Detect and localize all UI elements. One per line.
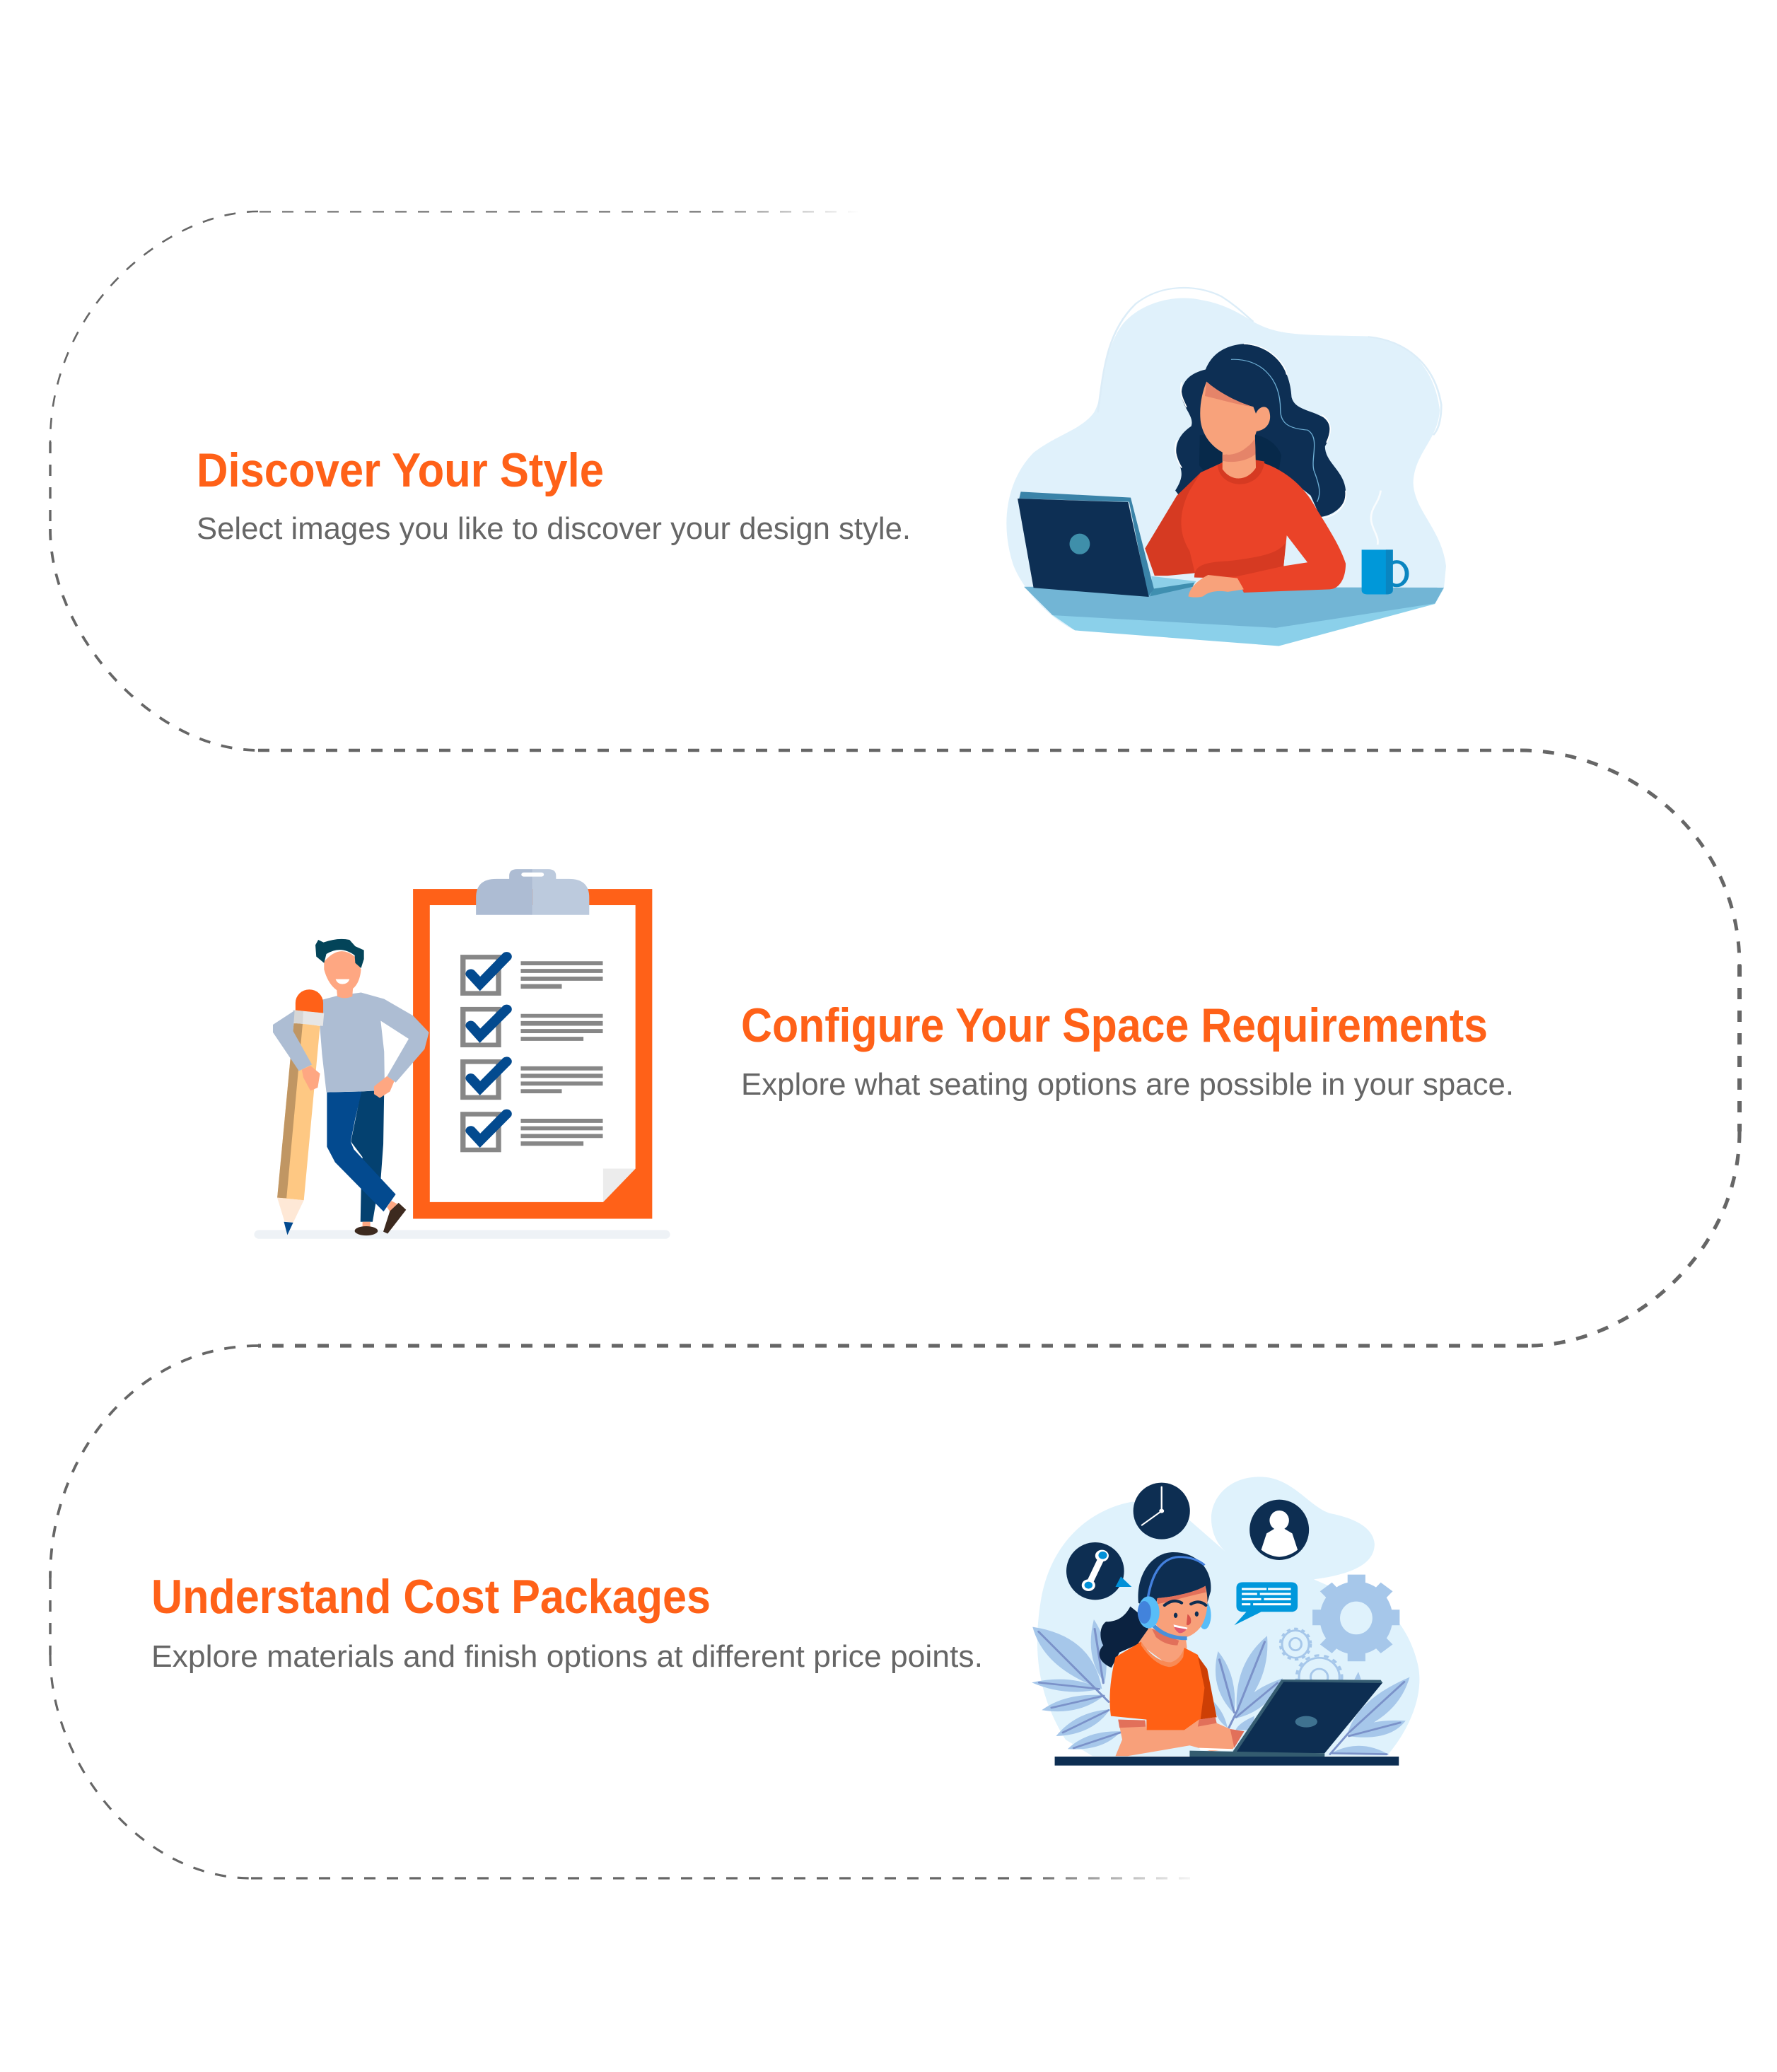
- blob background: [1006, 298, 1446, 632]
- table: [1024, 587, 1444, 646]
- laptop: [1189, 1680, 1382, 1757]
- man: [315, 939, 429, 1235]
- illustration: support agent with headset: [1032, 1477, 1419, 1766]
- red sweater: [1145, 460, 1346, 593]
- hair: [1175, 344, 1346, 518]
- heading: understand cost packages: Understand Cost Packages: [151, 1570, 711, 1624]
- ground: [254, 1230, 670, 1239]
- laptop: [1018, 491, 1196, 597]
- checklist row 3: [463, 1061, 602, 1098]
- agent: [1100, 1552, 1245, 1756]
- heading: discover your style: Discover Your Style: [197, 443, 604, 497]
- panel: understand cost packages text: [151, 1570, 983, 1674]
- illustration: man with clipboard and pencil: [254, 869, 670, 1239]
- clipboard: [413, 869, 652, 1218]
- panel: configure your space requirements text: [741, 999, 1514, 1102]
- man's left arm: [273, 1011, 320, 1090]
- user icon: [1249, 1500, 1309, 1560]
- description: discover your style: Select images you like to discover your design style.: [197, 511, 911, 546]
- heading: configure your space requirements: Configure Your Space Requirements: [741, 999, 1488, 1052]
- illustration: woman at laptop: [1006, 288, 1446, 646]
- blob background: [1037, 1477, 1419, 1756]
- description: understand cost packages: Explore materials and finish options at different price points.: [151, 1639, 983, 1674]
- panel: discover your style text: [197, 443, 911, 546]
- dashed connector path: [50, 211, 1740, 1878]
- checklist row 2: [463, 1009, 602, 1045]
- hand: [1189, 575, 1244, 598]
- chat bubble icon: [1234, 1582, 1298, 1625]
- checklist row 1: [463, 957, 602, 994]
- small gears: [1281, 1629, 1342, 1699]
- clock icon: [1134, 1483, 1190, 1540]
- leaves: [1032, 1619, 1410, 1755]
- description: configure your space requirements: Explore what seating options are possible in your space.: [741, 1067, 1514, 1102]
- checklist row 4: [463, 1114, 602, 1150]
- neck and face: [1200, 382, 1270, 478]
- coffee mug: [1362, 491, 1407, 594]
- pencil: [277, 989, 324, 1235]
- large gear: [1312, 1575, 1399, 1661]
- wrench icon: [1066, 1542, 1131, 1600]
- desk: [1055, 1757, 1399, 1766]
